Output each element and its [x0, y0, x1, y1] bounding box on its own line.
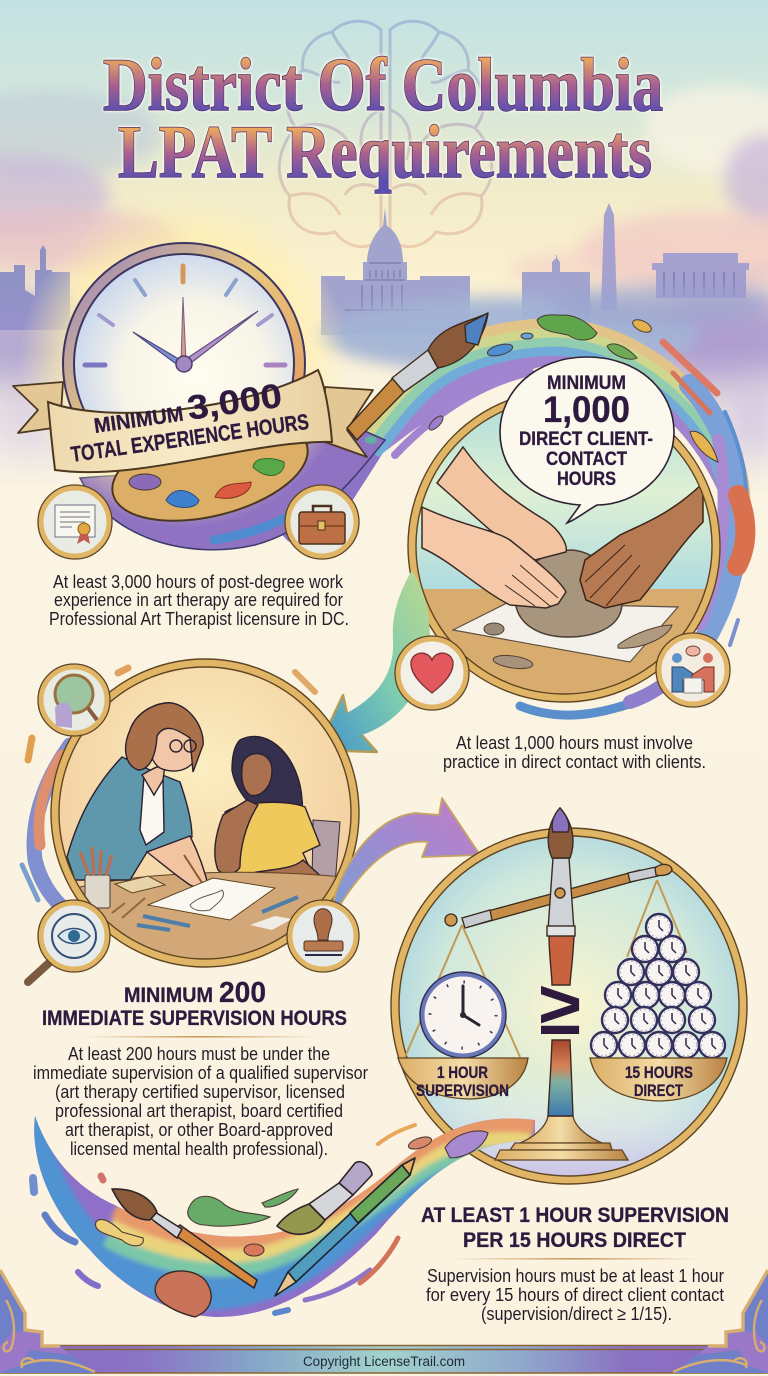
- label: 15 hours direct: 15 HOURS: [625, 1063, 693, 1082]
- label: 15 hours direct: [625, 1063, 693, 1100]
- band lower-left tail: [300, 425, 402, 525]
- paint swirl left of circle: [22, 668, 315, 905]
- bubble text: MINIMUM: [547, 373, 626, 394]
- band colour layers: [345, 318, 751, 712]
- icon: stamp: [287, 900, 359, 972]
- left pan: [398, 1058, 528, 1100]
- panel: direct client-contact hours: [317, 357, 730, 772]
- arrow: to supervision: [317, 570, 430, 752]
- heading: at least 1 hour supervision: AT LEAST 1 HOUR SUPERVISION: [421, 1204, 729, 1227]
- panel: total experience hours: [13, 197, 488, 629]
- banner text: minimum 3,000: [91, 377, 284, 441]
- icon: eye magnifier: [28, 900, 110, 982]
- teacher: [67, 703, 210, 893]
- bubble text: 1,000: [543, 389, 630, 430]
- greater-or-equal symbol: ≥: [539, 966, 581, 1051]
- footer band: [0, 1270, 768, 1373]
- icon: heart: [395, 636, 469, 710]
- skyline: Lincoln Memorial: [652, 253, 749, 298]
- right pan strings: [627, 880, 687, 957]
- text: total hours description: Professional Art Therapist licensure in DC.: [49, 608, 349, 629]
- paint brush pole: [547, 808, 575, 1116]
- supervision scene: [60, 668, 350, 958]
- icon: certificate: [38, 485, 112, 559]
- heading: minimum 200: 200: [219, 977, 266, 1009]
- text: supervision description: At least 200 hours must be under the: [68, 1043, 330, 1064]
- label: 1 hour supervision: 1 HOUR: [437, 1063, 488, 1082]
- icon: briefcase: [285, 485, 359, 559]
- icon: round brush: [112, 1189, 257, 1288]
- heading: minimum 200: MINIMUM: [124, 984, 213, 1007]
- purple watercolor wash: [0, 285, 768, 465]
- banner ribbon: [48, 370, 332, 472]
- copyright text: Copyright LicenseTrail.com: [303, 1354, 465, 1369]
- label: 15 hours direct: DIRECT: [634, 1081, 683, 1100]
- text: supervision description: [33, 1043, 368, 1159]
- text: supervision description: immediate supervision of a qualified supervisor: [33, 1062, 368, 1083]
- icon: large clock: [420, 972, 506, 1058]
- heading: minimum 200: [124, 977, 266, 1009]
- corner ornament: right: [673, 1270, 768, 1373]
- text: ratio description: [426, 1265, 724, 1324]
- table items: [80, 847, 298, 930]
- icon: people talking: [656, 633, 730, 707]
- clay hands illustration: [416, 412, 712, 694]
- icon: pencil: [275, 1158, 415, 1296]
- text: total hours description: At least 3,000 hours of post-degree work: [53, 571, 344, 592]
- gold ring frame: [51, 659, 359, 967]
- label: 1 hour supervision: [416, 1063, 509, 1100]
- icon: art review magnifier: [38, 664, 110, 736]
- gold ring frame: [391, 828, 747, 1184]
- title: LPAT Requirements: [118, 111, 652, 194]
- pile of small clocks: [591, 914, 725, 1058]
- bubble text: HOURS: [557, 469, 616, 490]
- icon: paint palette: [102, 401, 318, 539]
- bubble text: DIRECT CLIENT-: [519, 429, 653, 450]
- panel: supervision ratio scale: [20, 808, 747, 1330]
- icon: paint brush: [347, 313, 488, 440]
- student: [214, 736, 321, 875]
- skyline: Capitol building: [321, 208, 470, 335]
- paint swirl under clock: [80, 420, 385, 550]
- text: direct contact description: [443, 732, 706, 772]
- text: ratio description: Supervision hours must be at least 1 hour: [427, 1265, 724, 1286]
- paint blobs on band: [427, 315, 718, 462]
- text: supervision description: licensed mental health professional).: [70, 1138, 328, 1159]
- text: ratio description: for every 15 hours of direct client contact: [426, 1284, 724, 1305]
- banner text: total experience hours: TOTAL EXPERIENCE HOURS: [69, 409, 310, 467]
- stand base: [495, 1116, 628, 1160]
- paint blobs: [95, 1131, 488, 1317]
- text: total hours description: [49, 571, 349, 629]
- banner text: minimum 3,000: 3,000: [185, 377, 284, 428]
- label: 1 hour supervision: SUPERVISION: [416, 1081, 509, 1100]
- bubble text: [519, 373, 653, 490]
- bubble text: CONTACT: [546, 449, 627, 470]
- skyline: Washington Monument: [601, 203, 617, 310]
- speech bubble: [500, 357, 674, 523]
- panel: immediate supervision hours: [22, 659, 480, 1159]
- banner text: minimum 3,000: MINIMUM: [92, 403, 185, 438]
- cream interior: [340, 365, 726, 725]
- title: [103, 44, 663, 194]
- clouds: [0, 85, 768, 290]
- bottom paint swirl: [29, 1116, 535, 1317]
- corner ornament: left: [0, 1270, 95, 1373]
- paint swirl: top rainbow band: [300, 315, 751, 725]
- brain outline watermark: [279, 21, 492, 247]
- gold ring frame: [408, 390, 720, 702]
- text: direct contact description: At least 1,000 hours must involve: [456, 732, 693, 753]
- text: supervision description: professional art therapist, board certified: [55, 1100, 343, 1121]
- paint flecks: [33, 1125, 415, 1313]
- text: supervision description: art therapist, or other Board-approved: [65, 1119, 333, 1140]
- text: total hours description: experience in art therapy are required for: [54, 589, 343, 610]
- table: [80, 872, 336, 958]
- text: ratio description: (supervision/direct ≥ 1/15).: [481, 1303, 672, 1324]
- circle background: [395, 830, 745, 1185]
- rainbow band body: [34, 1116, 535, 1317]
- title: District Of Columbia: [103, 44, 663, 127]
- skyline: flag building: [522, 255, 590, 335]
- text: direct contact description: practice in direct contact with clients.: [443, 751, 706, 772]
- right pan: [590, 1058, 727, 1101]
- icon: flat brush: [277, 1162, 372, 1234]
- icon: clock: [63, 243, 305, 485]
- text: supervision description: (art therapy certified supervisor, licensed: [55, 1081, 345, 1102]
- right side band: [395, 342, 746, 715]
- skyline of Washington DC: [0, 203, 749, 335]
- scale beam: [445, 864, 672, 928]
- heading: immediate supervision hours: IMMEDIATE SUPERVISION HOURS: [42, 1007, 347, 1030]
- skyline: left buildings: [0, 245, 70, 330]
- clock glow: [19, 197, 349, 527]
- chair: [312, 820, 340, 885]
- arrow: to scale: [333, 798, 480, 905]
- heading: per 15 hours direct: PER 15 HOURS DIRECT: [463, 1229, 686, 1252]
- icon: ribbon banner tails: [13, 382, 373, 457]
- left pan strings: [405, 925, 520, 1057]
